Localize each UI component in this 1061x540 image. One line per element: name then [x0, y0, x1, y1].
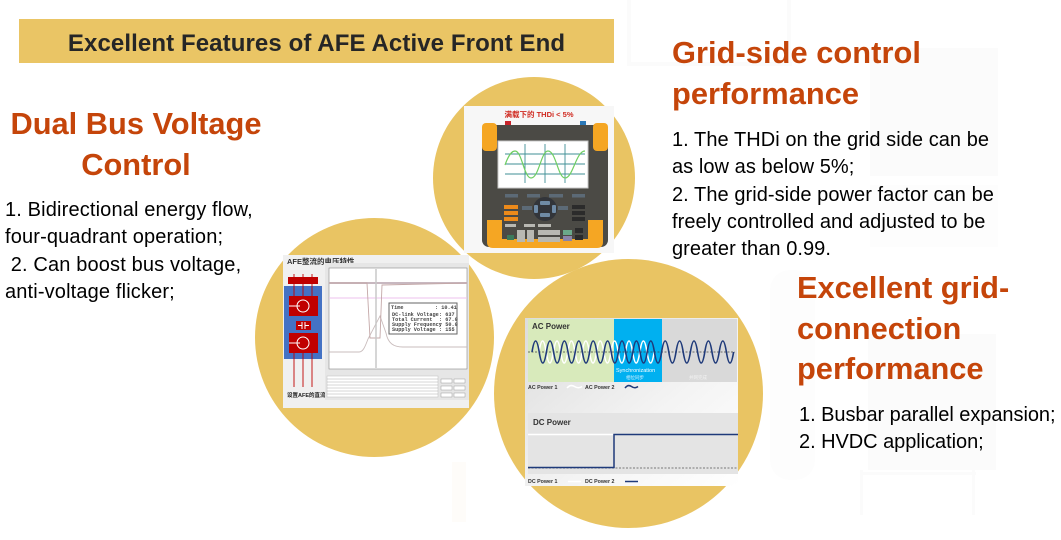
image: AFE voltage characteristic chart: Supply Voltage — [392, 327, 436, 333]
heading: Dual Bus Voltage Control — [10, 106, 261, 182]
text: grid-side points: greater than 0.99. — [672, 238, 831, 260]
text: grid-connection points — [799, 404, 1056, 453]
text: grid-side points: 1. The THDi on the grid side can be — [672, 129, 989, 151]
title banner — [19, 19, 614, 63]
AC legend: AC Power 1 — [528, 385, 557, 391]
AC power panel: Synchronization — [616, 368, 655, 374]
image: AFE voltage characteristic chart: 设置AFE的直流 — [287, 391, 326, 399]
heading: Excellent grid-connection performance — [797, 270, 1009, 386]
DC legend: DC Power 2 — [585, 479, 614, 485]
DC legend: DC Power 1 — [528, 479, 557, 485]
AC power panel: 并网完成 — [689, 374, 707, 381]
heading: Dual Bus Voltage Control: Control — [81, 146, 191, 182]
heading: Excellent grid-connection performance: Excellent grid- — [797, 270, 1009, 305]
heading: Grid-side control performance — [672, 35, 921, 110]
heading: Dual Bus Voltage Control: Dual Bus Voltage — [10, 106, 261, 141]
text: grid-side points — [672, 129, 994, 260]
AC legend: AC Power 2 — [585, 385, 614, 391]
AC power panel: 相位同步 — [626, 374, 644, 381]
image: AFE voltage characteristic chart — [283, 255, 469, 408]
image: AFE voltage characteristic chart: : 50.0 — [439, 322, 458, 328]
text: grid-side points: freely controlled and adjusted to be — [672, 211, 985, 233]
title banner: Excellent Features of AFE Active Front End — [68, 30, 565, 57]
chart title: AFE整流的电压特性 — [287, 256, 355, 266]
image: AFE voltage characteristic chart: : 637 — [439, 312, 455, 318]
circle: voltage chart backdrop — [255, 218, 494, 457]
image: AFE voltage characteristic chart: : 10.41 — [435, 305, 457, 311]
text: grid-connection points: 1. Busbar parallel expansion; — [799, 404, 1056, 426]
DC legend — [528, 479, 638, 485]
text: grid-side points: 2. The grid-side power factor can be — [672, 184, 994, 206]
text: dual bus points: anti-voltage flicker; — [5, 281, 175, 303]
DC power panel — [528, 413, 738, 474]
image: AC and DC power synchronisation chart — [525, 318, 738, 486]
image: oscilloscope with THDi reading: 满载下的 THDi < 5% — [505, 109, 574, 119]
circle: THDi photo backdrop — [433, 77, 635, 279]
circle: power chart backdrop — [494, 259, 763, 528]
heading: Excellent grid-connection performance: connection — [797, 310, 961, 346]
heading: Grid-side control performance: Grid-side control — [672, 35, 921, 70]
text: dual bus points — [5, 199, 253, 303]
image: AFE voltage characteristic chart: Time — [391, 305, 403, 311]
text: grid-side points: as low as below 5%; — [672, 156, 854, 178]
image: AFE voltage characteristic chart: : 67.0 — [439, 317, 458, 323]
text: dual bus points: four-quadrant operation; — [5, 226, 223, 248]
image: AFE voltage characteristic chart: Total Current — [392, 317, 432, 323]
AC legend — [528, 385, 638, 391]
text: grid-connection points: 2. HVDC application; — [799, 431, 984, 453]
DC power panel: DC Power — [533, 418, 571, 427]
image: oscilloscope with THDi reading — [464, 106, 614, 253]
image: AFE voltage characteristic chart: Supply Frequency — [392, 322, 443, 328]
image: AFE voltage characteristic chart: : 155 — [439, 327, 455, 333]
text: dual bus points: 2. Can boost bus voltage, — [11, 254, 241, 276]
heading: Grid-side control performance: performance — [672, 76, 859, 110]
image: AFE voltage characteristic chart: DC-link Voltage — [392, 312, 439, 318]
text: dual bus points: 1. Bidirectional energy flow, — [5, 199, 253, 221]
heading: Excellent grid-connection performance: performance — [797, 351, 984, 386]
AC power panel — [528, 319, 737, 382]
AC power panel: AC Power — [532, 322, 570, 331]
